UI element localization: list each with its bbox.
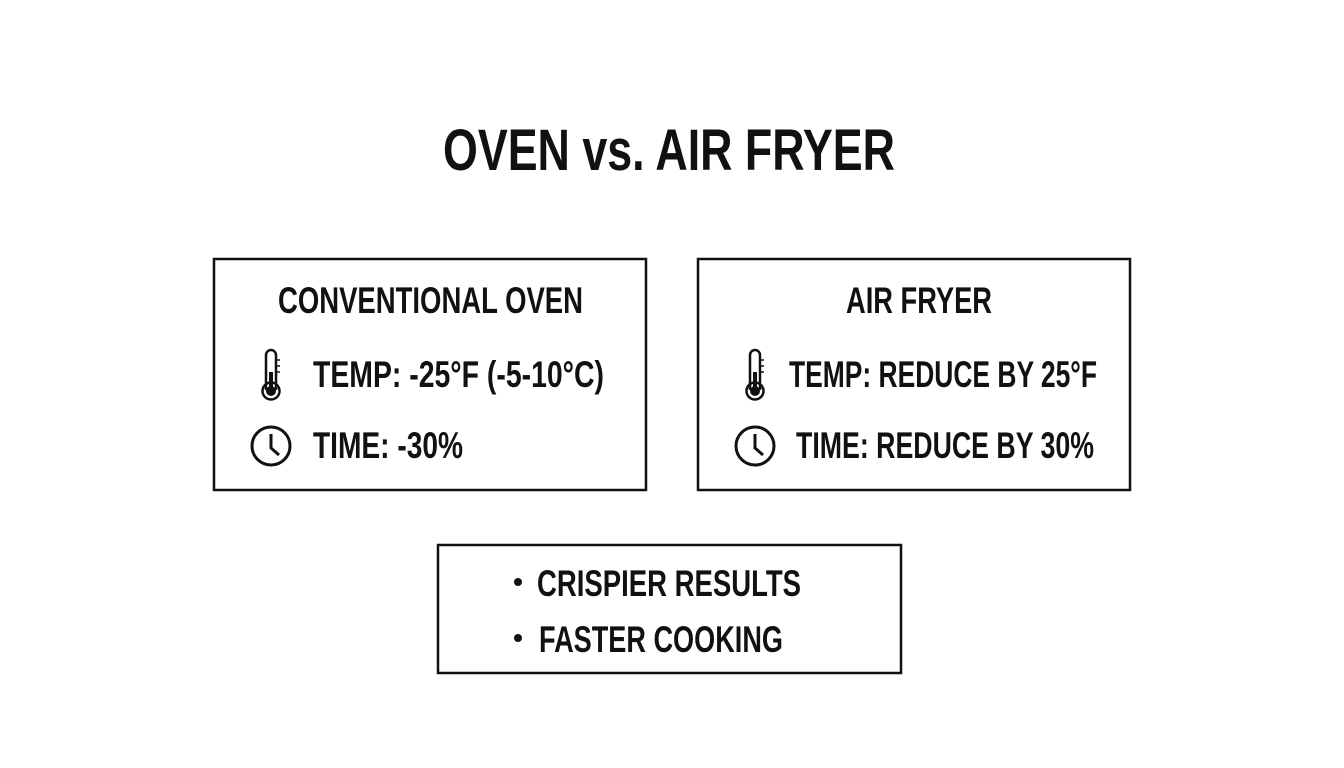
text: time: TIME: -30% [313, 425, 463, 466]
panel: benefits [438, 545, 901, 673]
heading: air fryer: AIR FRYER [846, 280, 992, 321]
title: OVEN vs. AIR FRYER [443, 118, 895, 183]
panel: conventional oven [214, 259, 646, 490]
bullet: crispier results [514, 563, 801, 604]
bullet: crispier results: CRISPIER RESULTS [537, 563, 801, 604]
heading: conventional oven: CONVENTIONAL OVEN [278, 280, 583, 321]
text: time: TIME: REDUCE BY 30% [796, 425, 1094, 466]
text: temp: TEMP: -25°F (-5-10°C) [313, 354, 604, 395]
panel: air fryer [698, 259, 1130, 490]
bullet: faster cooking [514, 619, 783, 660]
icon: thermometer [262, 350, 280, 400]
icon: clock [252, 427, 290, 465]
bullet: faster cooking: FASTER COOKING [539, 619, 783, 660]
icon: thermometer [746, 350, 764, 400]
icon: clock [736, 427, 774, 465]
text: temp: TEMP: REDUCE BY 25°F [789, 354, 1097, 395]
